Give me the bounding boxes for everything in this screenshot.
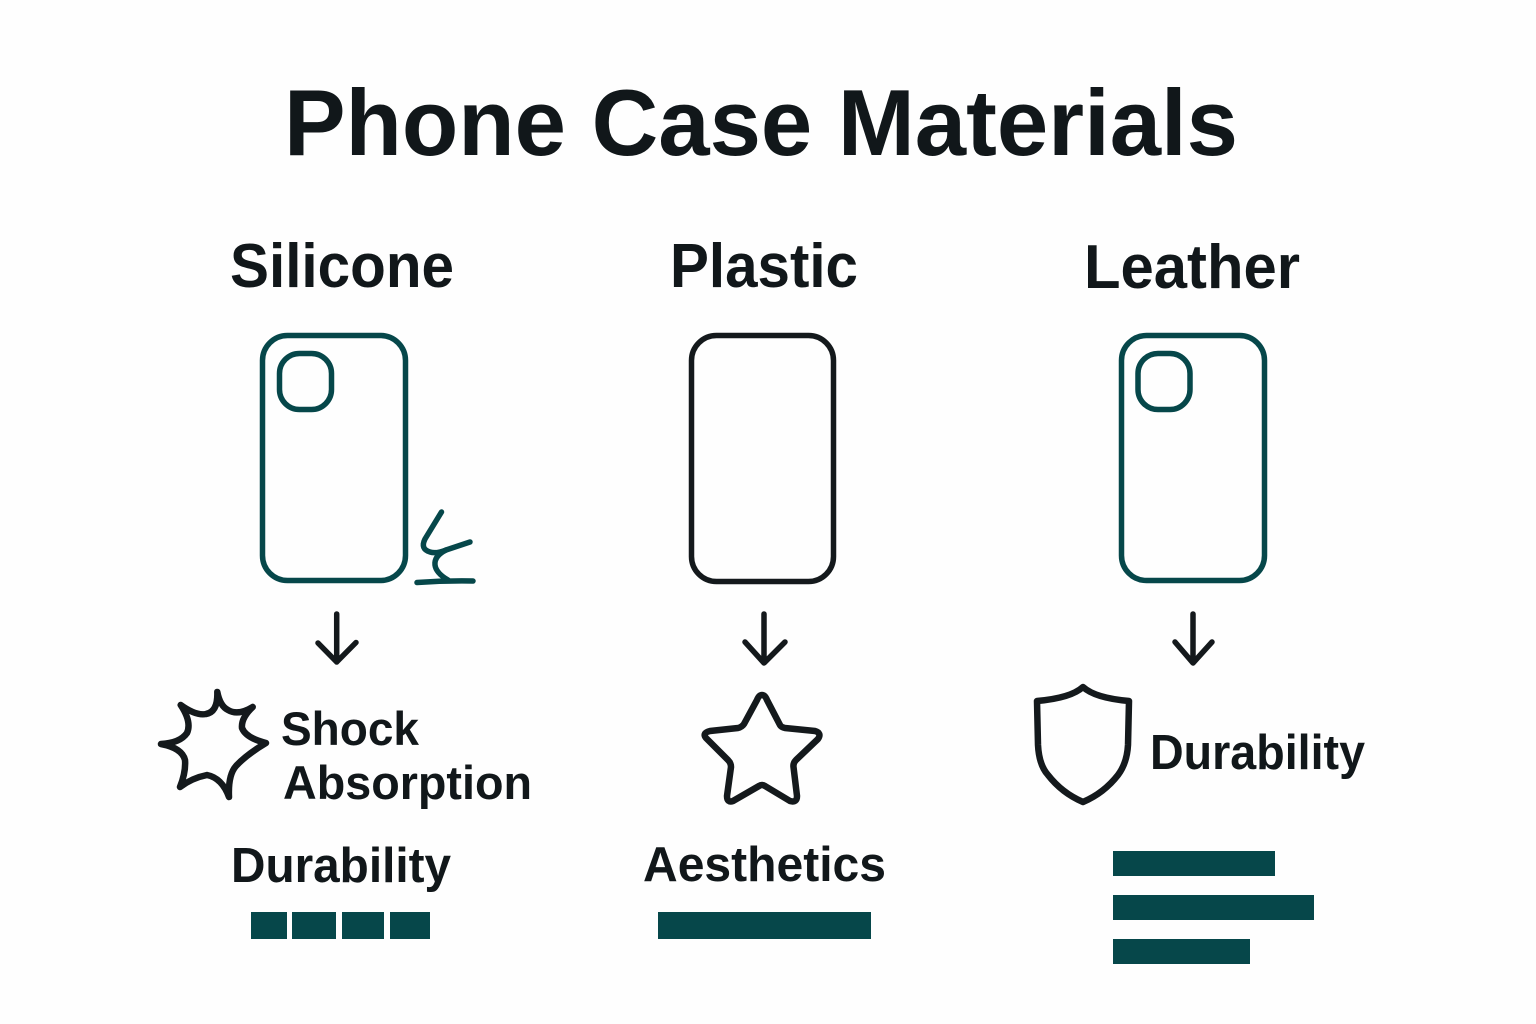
heading: leather: Leather <box>1084 233 1300 302</box>
icon: shock burst <box>161 692 266 797</box>
label: shock absorption <box>281 702 532 809</box>
icon: leather phone case <box>1122 336 1264 580</box>
label: aesthetics: Aesthetics <box>643 838 886 892</box>
rating bar: single bar <box>658 912 871 939</box>
arrow: silicone to shock absorption <box>318 614 356 662</box>
icon: shield <box>1037 687 1129 802</box>
label: durability: Durability <box>231 839 451 893</box>
label: durability: Durability <box>1150 726 1365 780</box>
rating bar: four segments <box>251 912 430 939</box>
heading: plastic: Plastic <box>670 232 858 301</box>
icon: silicone phone case <box>262 336 406 580</box>
title: Phone Case Materials <box>284 70 1238 175</box>
panel: plastic <box>643 232 886 939</box>
icon: flexible bend squiggle <box>417 512 473 582</box>
label: shock absorption: Shock <box>281 702 420 755</box>
arrow: leather to durability <box>1175 614 1212 663</box>
rating bars: three bars <box>1113 851 1314 964</box>
icon: star <box>705 695 819 801</box>
panel: leather <box>1037 233 1365 964</box>
panel: silicone <box>161 232 532 939</box>
icon: plastic phone case <box>692 336 834 582</box>
heading: silicone: Silicone <box>230 232 454 301</box>
arrow: plastic to aesthetics <box>745 614 785 663</box>
label: shock absorption: Absorption <box>283 756 532 809</box>
